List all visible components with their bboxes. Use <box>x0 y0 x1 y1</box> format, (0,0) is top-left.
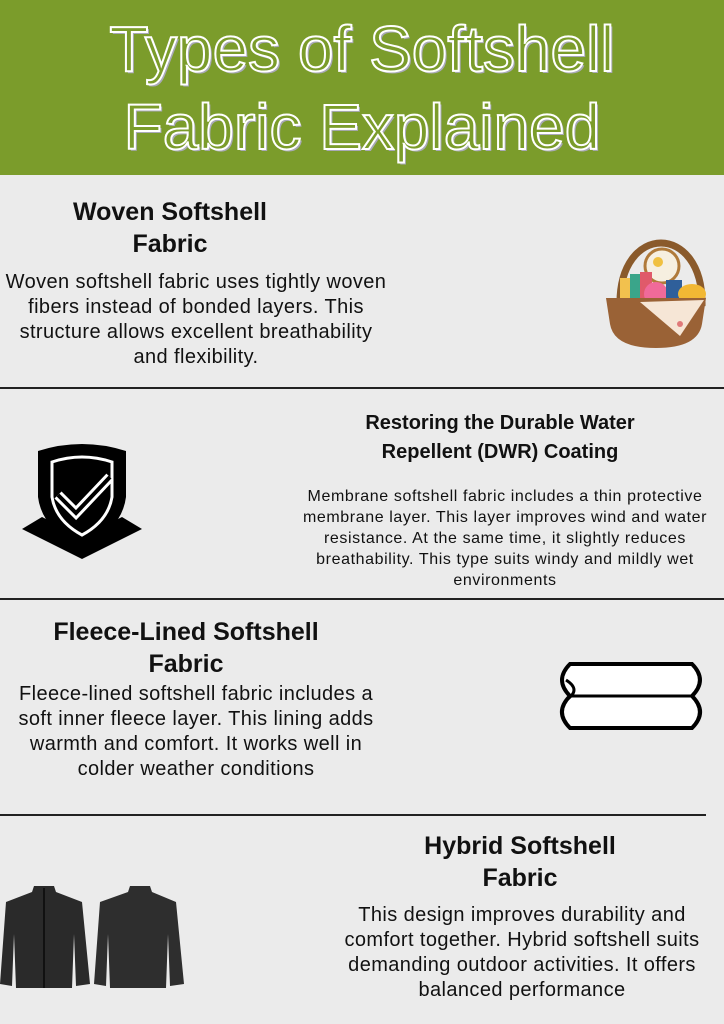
panel: DWR <box>22 412 707 589</box>
icon: basket <box>606 240 706 348</box>
text: woven: Woven softshell fabric uses tightly woven <box>6 271 386 293</box>
title <box>109 13 615 164</box>
text: hybrid: comfort together. Hybrid softshell suits <box>344 929 700 951</box>
text: DWR: environments <box>453 572 557 589</box>
heading: hybrid: Hybrid Softshell <box>424 832 616 860</box>
text: woven <box>6 271 386 368</box>
text: DWR: resistance. At the same time, it slightly reduces <box>324 530 686 547</box>
text: DWR: breathability. This type suits windy and mildly wet <box>316 551 694 568</box>
heading: fleece: Fabric <box>148 650 224 678</box>
icon: shield <box>22 444 142 559</box>
heading: hybrid: Fabric <box>482 864 558 892</box>
heading: woven <box>73 198 267 258</box>
heading: fleece <box>53 618 319 678</box>
heading: DWR: Repellent (DWR) Coating <box>382 441 618 463</box>
text: DWR <box>303 488 707 589</box>
heading: DWR: Restoring the Durable Water <box>365 412 635 434</box>
text: woven: fibers instead of bonded layers. This <box>28 296 364 318</box>
heading: woven: Woven Softshell <box>73 198 267 226</box>
text: fleece: warmth and comfort. It works well in <box>30 733 362 755</box>
text: fleece: Fleece-lined softshell fabric includes a <box>19 683 373 705</box>
text: hybrid <box>344 904 700 1001</box>
panel: woven <box>6 198 706 368</box>
panel: fleece <box>18 618 702 780</box>
heading: woven: Fabric <box>132 230 208 258</box>
text: hybrid: This design improves durability and <box>358 904 686 926</box>
text: woven: and flexibility. <box>134 346 258 368</box>
text: hybrid: demanding outdoor activities. It offers <box>348 954 696 976</box>
text: DWR: membrane layer. This layer improves wind and water <box>303 509 707 526</box>
heading: hybrid <box>424 832 616 892</box>
text: DWR: Membrane softshell fabric includes a thin protective <box>308 488 702 505</box>
icon: folded blanket <box>560 662 702 730</box>
text: woven: structure allows excellent breathability <box>20 321 372 343</box>
title banner <box>0 0 724 175</box>
heading: fleece: Fleece-Lined Softshell <box>53 618 319 646</box>
heading: DWR <box>365 412 635 463</box>
icon: jackets <box>0 886 184 988</box>
title: Fabric Explained <box>124 91 600 163</box>
text: fleece: soft inner fleece layer. This lining adds <box>18 708 374 730</box>
text: fleece: colder weather conditions <box>78 758 314 780</box>
text: hybrid: balanced performance <box>418 979 626 1001</box>
text: fleece <box>18 683 374 780</box>
panel: hybrid <box>0 832 700 1001</box>
title: Types of Softshell <box>109 13 615 85</box>
